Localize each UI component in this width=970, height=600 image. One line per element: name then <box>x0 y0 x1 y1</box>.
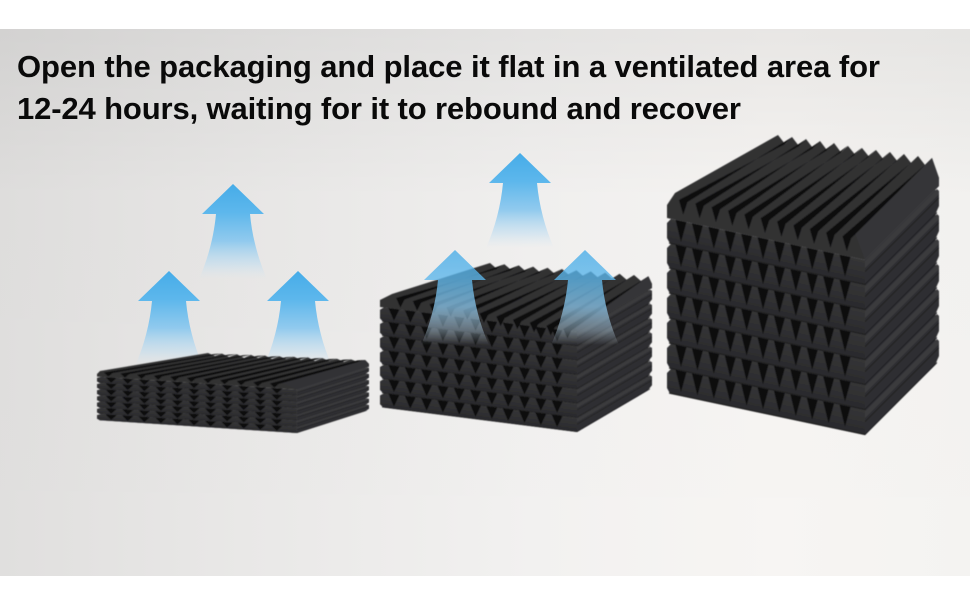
icon: airflow arrows above thin stack <box>135 184 332 366</box>
foam stack: half recovered <box>380 263 652 432</box>
icon: airflow arrows over medium stack <box>421 250 619 345</box>
title: 12-24 hours, waiting for it to rebound and recover <box>17 91 741 126</box>
title: Open the packaging and place it flat in a ventilated area for <box>17 49 880 84</box>
foam stack: compressed <box>97 353 369 433</box>
title <box>17 49 880 126</box>
icon: rear airflow arrow above medium stack <box>486 153 554 248</box>
foam stack: fully recovered <box>667 135 939 435</box>
